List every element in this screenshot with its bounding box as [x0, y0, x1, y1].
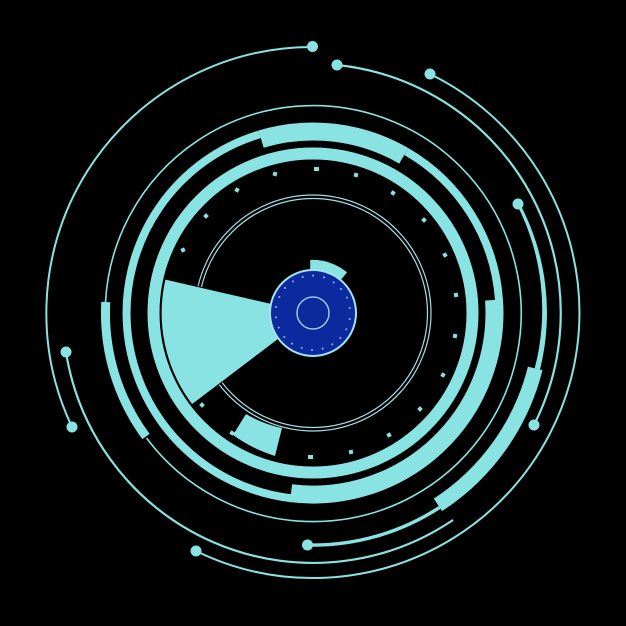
segmented ring r190: [127, 132, 499, 498]
bottom arc with dot: [302, 507, 440, 550]
right tapered arc with dot: [512, 198, 547, 370]
disc dots: [275, 275, 351, 351]
outer arc: top dot sweeping left to lower-left dot: [46, 41, 318, 432]
thick segment left: [105, 302, 146, 436]
inner double ring: [195, 195, 431, 431]
arc: top dot to lower right dot: [332, 60, 561, 430]
bottom sector block: [233, 414, 282, 456]
center disc: [270, 270, 356, 356]
arc: left dot sweeping through bottom to lower right: [60, 346, 453, 563]
small sector above disc: [310, 260, 347, 282]
full ring r160: [154, 154, 472, 472]
outer arc: right dot sweeping around to bottom dot: [190, 68, 580, 578]
center ring: [297, 297, 329, 329]
thin ring r208: [106, 106, 521, 522]
thick segment lower right: [438, 368, 535, 505]
large wedge sector: [161, 279, 313, 405]
tick squares ring: [180, 167, 458, 459]
